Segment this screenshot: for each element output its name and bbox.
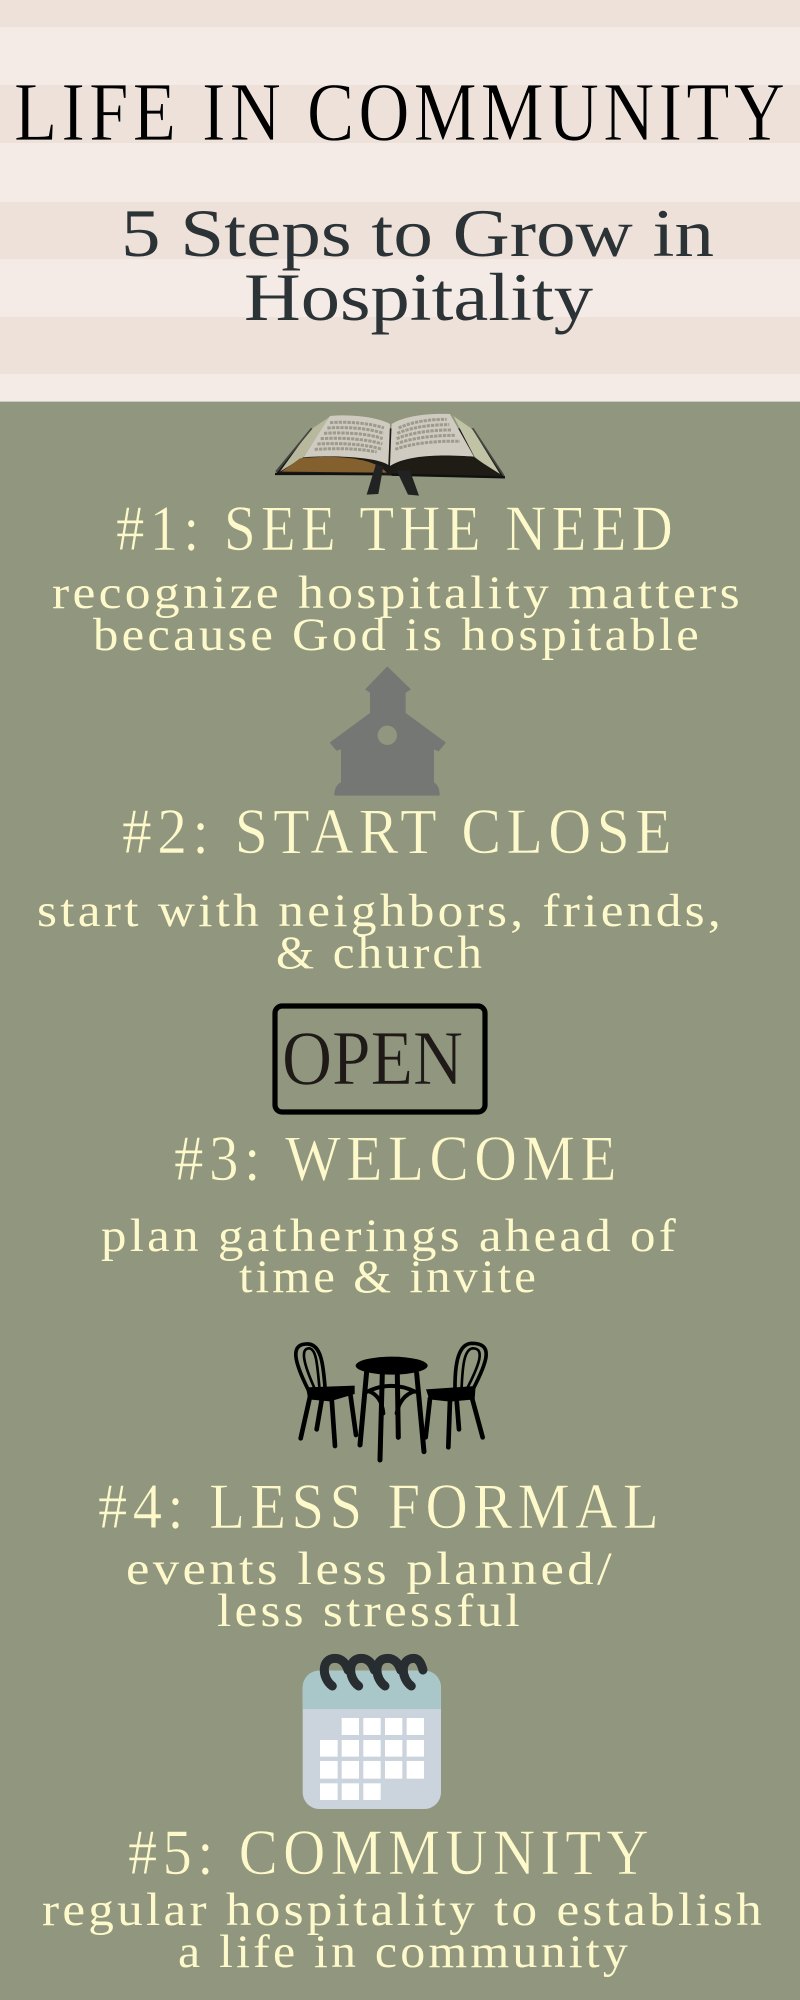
panel: striped header background [0, 0, 800, 402]
step 1 [52, 414, 743, 661]
text: step 2 description: & church [276, 927, 485, 979]
text: step 5 description: a life in community [178, 1926, 631, 1978]
text: step 3 description [101, 1210, 679, 1303]
icon: church [331, 667, 445, 795]
heading: step 1: #1: SEE THE NEED [116, 493, 678, 565]
text: step 4 description: less stressful [217, 1585, 523, 1637]
icon: bistro table and chairs [296, 1343, 486, 1460]
subtitle: Hospitality [244, 259, 593, 335]
text: step 4 description: events less planned/ [126, 1543, 615, 1595]
text: step 2 description: start with neighbors, friends, [37, 885, 724, 937]
step 3 [101, 1006, 679, 1303]
heading: step 2: #2: START CLOSE [122, 796, 677, 868]
heading: step 4: #4: LESS FORMAL [98, 1471, 664, 1543]
heading: step 5: #5: COMMUNITY [128, 1817, 654, 1889]
text: step 5 description: regular hospitality to establish [42, 1884, 765, 1936]
icon: open sign: OPEN [282, 1015, 463, 1101]
step 5 [42, 1658, 765, 1978]
heading: step 3: #3: WELCOME [174, 1123, 622, 1195]
text: step 4 description [126, 1543, 615, 1637]
text: step 3 description: plan gatherings ahead of [101, 1210, 679, 1262]
text: step 3 description: time & invite [239, 1251, 539, 1303]
text: step 1 description: because God is hospitable [93, 609, 702, 661]
panel: green steps background [0, 402, 800, 2000]
step 4 [98, 1343, 664, 1637]
subtitle: 5 Steps to Grow in [121, 195, 714, 271]
icon: calendar [303, 1658, 441, 1809]
text: step 2 description [37, 885, 724, 979]
subtitle [121, 195, 714, 335]
text: step 1 description [52, 567, 743, 661]
text: step 5 description [42, 1884, 765, 1978]
icon: open bible [275, 414, 505, 496]
step 2 [37, 667, 724, 979]
text: step 1 description: recognize hospitality matters [52, 567, 743, 619]
